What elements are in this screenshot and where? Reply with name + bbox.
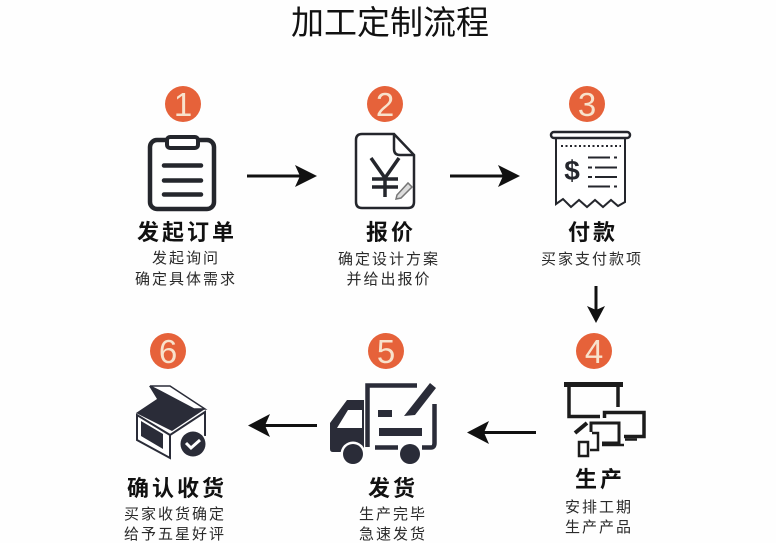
text: 发起询问 确定具体需求: 确定具体需求: [135, 271, 237, 288]
badge 5: 5: [377, 333, 395, 370]
icon: receipt: [551, 132, 630, 207]
text: 买家收货确定 给予五星好评: 给予五星好评: [124, 526, 226, 543]
badge 6: [150, 333, 186, 370]
text: 发起询问 确定具体需求: 发起询问: [152, 250, 220, 267]
step 3: payment: [541, 86, 643, 268]
text: 生产完毕 急速发货: 生产完毕: [359, 506, 427, 523]
heading: 付款: 付款: [568, 220, 618, 245]
step 5: shipping: [330, 333, 436, 543]
step 2: quotation: [338, 86, 440, 288]
text: 买家支付款项: 买家支付款项: [541, 251, 643, 268]
text: 安排工期 生产产品: 生产产品: [565, 519, 633, 536]
badge 5: [368, 333, 404, 370]
text: 买家收货确定 给予五星好评: 买家收货确定: [124, 506, 226, 523]
badge 6: 6: [159, 333, 177, 370]
text: 安排工期 生产产品: [565, 499, 633, 536]
heading: 发起订单: 发起订单: [137, 220, 237, 245]
step 1: submit order: [135, 86, 237, 288]
heading: 报价: 报价: [366, 220, 416, 245]
title: 加工定制流程: [291, 4, 489, 41]
text: 安排工期 生产产品: 安排工期: [565, 499, 633, 516]
icon: receipt: $: [564, 155, 580, 186]
heading: 发货: 发货: [368, 476, 418, 501]
text: 买家收货确定 给予五星好评: [124, 506, 226, 543]
text: 确定设计方案 并给出报价: 确定设计方案: [338, 250, 440, 268]
icon: screens and devices: [564, 384, 644, 456]
text: 确定设计方案 并给出报价: 并给出报价: [346, 271, 432, 288]
arrow: step 1 to 2: [247, 165, 317, 187]
icon: truck with pen: [330, 383, 436, 466]
heading: 生产: 生产: [575, 467, 625, 492]
icon: yen document: [356, 134, 414, 208]
arrow: step 5 to 6: [248, 414, 317, 437]
step 6: confirm receipt: [124, 333, 227, 543]
badge 2: [367, 86, 403, 123]
arrow: step 4 to 5: [467, 421, 536, 444]
step 4: production: [564, 333, 644, 536]
badge 4: 4: [585, 333, 603, 370]
badge 3: 3: [578, 86, 596, 123]
badge 3: [569, 86, 605, 123]
badge 1: [165, 86, 201, 123]
text: 生产完毕 急速发货: 急速发货: [359, 526, 427, 543]
icon: clipboard: [150, 137, 214, 209]
icon: parcel box with check: [136, 386, 207, 458]
text: 发起询问 确定具体需求: [135, 250, 237, 288]
badge 1: 1: [174, 86, 192, 123]
arrow: step 2 to 3: [450, 165, 520, 187]
badge 2: 2: [376, 86, 394, 123]
text: 确定设计方案 并给出报价: [338, 250, 440, 288]
text: 生产完毕 急速发货: [359, 506, 427, 543]
heading: 确认收货: 确认收货: [127, 476, 227, 501]
badge 4: [576, 333, 612, 370]
arrow: step 3 to 4: [587, 286, 605, 323]
